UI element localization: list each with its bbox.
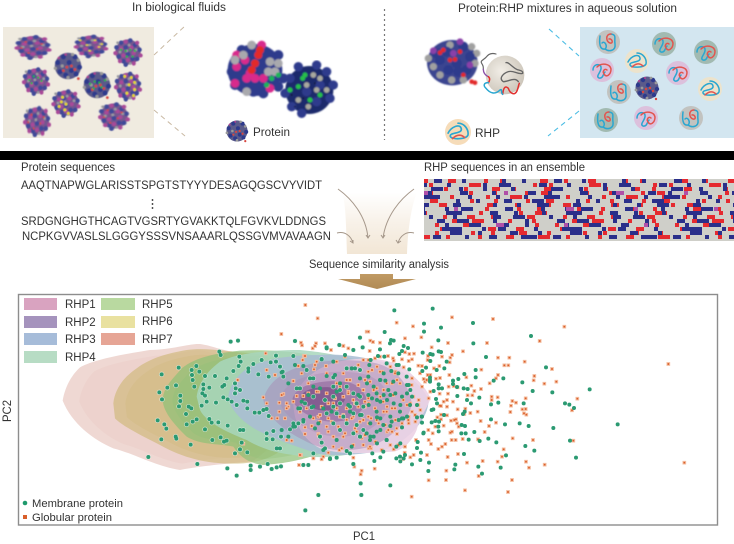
legend: protein: Protein bbox=[253, 127, 290, 139]
icon: RHP pink 1 bbox=[590, 58, 614, 82]
panel: PCA plot bbox=[18, 294, 718, 525]
icon: protein 9 bbox=[25, 107, 49, 135]
scatter: membrane proteins bbox=[148, 309, 618, 510]
heading: protein sequences: Protein sequences bbox=[21, 162, 115, 174]
legend item: RHP1 bbox=[24, 298, 96, 311]
text block: protein sequences bbox=[21, 180, 331, 243]
legend item: RHP3 bbox=[24, 333, 96, 346]
legend item: RHP7: RHP7 bbox=[142, 334, 173, 346]
legend: protein bbox=[226, 120, 290, 142]
icon: RHP gray 1 bbox=[596, 30, 620, 54]
icon: RHP pink 2 bbox=[666, 61, 690, 85]
legend item: RHP2 bbox=[24, 316, 96, 329]
text block: protein sequences: AAQTNAPWGLARISSTSPGTSTYYYDESAGQGSCVYVIDT bbox=[21, 180, 322, 192]
caption: sequence similarity analysis: Sequence similarity analysis bbox=[309, 259, 449, 271]
heading: protein RHP mixtures: Protein:RHP mixtures in aqueous solution bbox=[458, 3, 677, 15]
legend item: RHP5: RHP5 bbox=[142, 299, 173, 311]
icon: RHP sphere with chain bbox=[481, 53, 524, 94]
legend item: RHP2: RHP2 bbox=[65, 317, 96, 329]
legend: protein classes: Membrane protein bbox=[32, 498, 123, 510]
legend item: RHP7 bbox=[101, 333, 173, 346]
legend: protein classes: Globular protein bbox=[32, 512, 112, 524]
scatter: globular proteins bbox=[238, 305, 684, 497]
text block: protein sequences: NCPKGVVASLSLGGGYSSSVNSAAARLQSSGVMVAVAAGN bbox=[22, 231, 331, 243]
icon: protein 10 bbox=[100, 103, 128, 129]
icon: protein 8 bbox=[53, 90, 79, 116]
icon: protein 7 bbox=[116, 73, 140, 99]
legend item: RHP4: RHP4 bbox=[65, 352, 96, 364]
icon: protein 6 bbox=[84, 72, 110, 98]
icon: RHP pink 3 bbox=[634, 106, 658, 130]
density contours bbox=[63, 344, 430, 470]
legend item: RHP4 bbox=[24, 351, 96, 364]
density: RHP2 bbox=[263, 360, 412, 450]
icon: RHP teal 3 bbox=[594, 108, 618, 132]
heading: in biological fluids: In biological fluids bbox=[132, 2, 226, 14]
legend item: RHP6 bbox=[101, 316, 173, 328]
legend: RHP ensembles bbox=[24, 298, 173, 364]
legend item: RHP6: RHP6 bbox=[142, 316, 173, 328]
zoom lines: right bbox=[548, 29, 579, 136]
icon: protein bound to RHP bbox=[427, 40, 478, 85]
density: RHP7 bbox=[63, 344, 283, 470]
density: RHP1 bbox=[293, 359, 430, 453]
icon: large protein red magenta bbox=[228, 44, 283, 96]
separator band bbox=[0, 151, 734, 160]
arrow: down bbox=[338, 274, 416, 289]
legend item: RHP5 bbox=[101, 298, 173, 311]
icon: protein 3 bbox=[115, 39, 141, 65]
panel: proteins in biological fluids bbox=[3, 27, 154, 138]
icon: RHP teal 2 bbox=[694, 40, 718, 64]
heatmap: RHP sequences bbox=[424, 179, 734, 241]
arrows into funnel bbox=[337, 189, 414, 243]
icon: protein 4 bbox=[55, 53, 81, 79]
legend: RHP bbox=[445, 119, 500, 145]
text block: protein sequences: SRDGNGHGTHCAGTVGSRTYGVAKKTQLFGVKVLDDNGS bbox=[21, 216, 326, 228]
density: RHP4 bbox=[197, 350, 393, 457]
legend: RHP: RHP bbox=[475, 128, 500, 140]
funnel bbox=[342, 192, 417, 254]
icon: RHP gray 2 bbox=[607, 80, 631, 104]
panel: protein RHP mixtures bbox=[580, 27, 734, 138]
icon: RHP beige 2 bbox=[698, 77, 722, 101]
icon: large protein green bbox=[285, 65, 333, 114]
icon: RHP beige 1 bbox=[625, 49, 649, 73]
zoom lines: left bbox=[154, 25, 186, 136]
icon: protein 5 bbox=[24, 68, 48, 94]
density: RHP3 bbox=[228, 355, 428, 455]
density: RHP6 bbox=[113, 349, 300, 464]
icon: RHP teal 1 bbox=[652, 32, 676, 56]
legend: protein classes bbox=[23, 498, 123, 524]
icon: protein 1 bbox=[17, 36, 49, 58]
axis label: PC1: PC1 bbox=[353, 531, 375, 543]
density: RHP5 bbox=[163, 350, 353, 465]
legend item: RHP1: RHP1 bbox=[65, 299, 96, 311]
icon: RHP gray 3 bbox=[679, 106, 703, 130]
heading: RHP sequences: RHP sequences in an ensemble bbox=[424, 162, 585, 174]
legend item: RHP3: RHP3 bbox=[65, 334, 96, 346]
icon: protein in solution bbox=[636, 76, 658, 100]
divider bbox=[384, 9, 386, 140]
axis label: PC2: PC2 bbox=[2, 400, 14, 422]
icon: protein 2 bbox=[76, 36, 106, 56]
